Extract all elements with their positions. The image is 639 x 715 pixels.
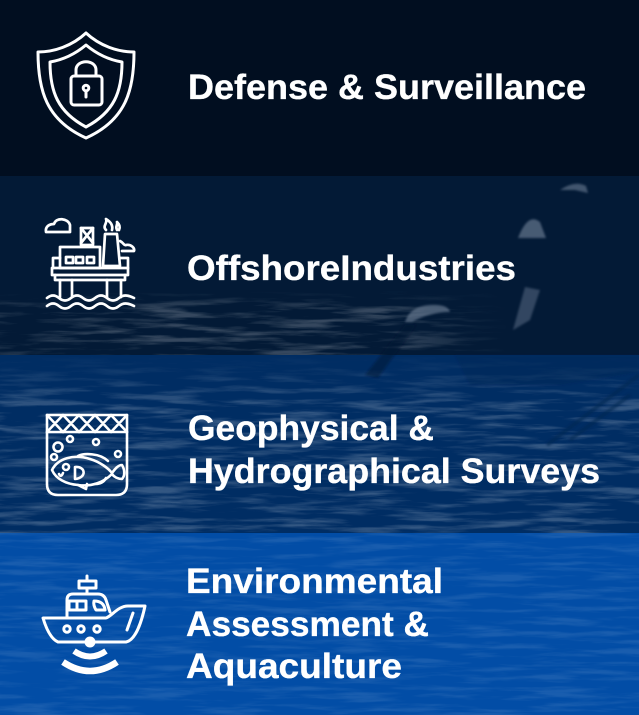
heading: Geophysical & Hydrographical Surveys: Geophysical &	[188, 409, 434, 448]
diver silhouette	[365, 184, 639, 445]
panel: defense band	[0, 0, 639, 176]
heading: Geophysical & Hydrographical Surveys: Hydrographical Surveys	[188, 452, 600, 491]
icon: shield with padlock	[38, 33, 134, 138]
heading: Geophysical & Hydrographical Surveys	[188, 409, 600, 491]
panel: offshore band	[0, 176, 639, 355]
panel: environmental band	[0, 533, 639, 715]
heading: Environmental Assessment & Aquaculture: Environmental	[186, 562, 443, 601]
heading: Defense & Surveillance: Defense & Surveillance	[188, 68, 586, 107]
icon: fish in net enclosure	[47, 415, 127, 495]
water texture	[0, 290, 639, 715]
icon: offshore oil rig	[46, 219, 134, 308]
panel: geophysical band	[0, 355, 639, 533]
heading: Environmental Assessment & Aquaculture: Assessment &	[186, 605, 429, 644]
heading: Environmental Assessment & Aquaculture	[186, 562, 443, 686]
heading: Environmental Assessment & Aquaculture: Aquaculture	[186, 647, 402, 686]
icon: sonar waves	[63, 636, 117, 671]
icon: survey vessel with sonar	[43, 576, 145, 671]
heading: Offshore Industries: OffshoreIndustries	[187, 249, 516, 288]
